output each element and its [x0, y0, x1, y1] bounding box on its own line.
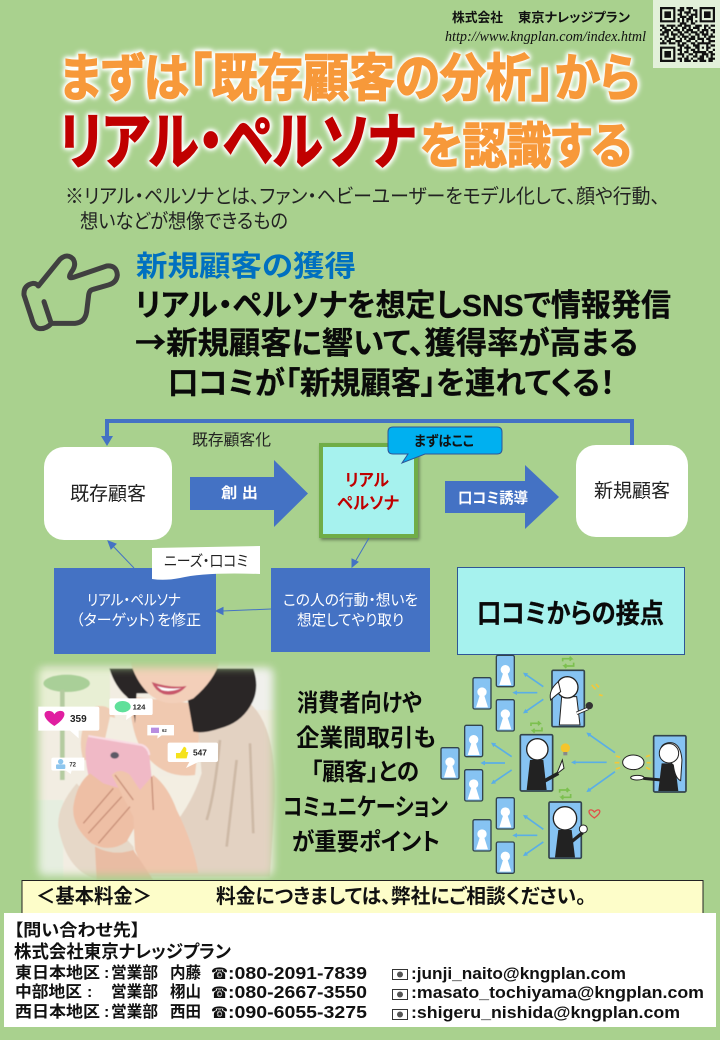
contact row: central: :masato_tochiyama@kngplan.com	[411, 983, 704, 1002]
person: speaker with speech bubble	[615, 736, 686, 792]
contact row: central: :	[87, 984, 92, 1001]
contact row: central: ☎	[211, 983, 228, 1002]
box: word of mouth touchpoint	[458, 568, 684, 654]
person: ponytail	[550, 670, 603, 727]
bubble: comment 124: 124	[133, 703, 146, 712]
bubble: person 72	[51, 758, 84, 774]
box: assume behaviour: この人の行動・想いを	[283, 592, 418, 609]
right hand	[112, 771, 198, 873]
contact row: west: :shigeru_nishida@kngplan.com	[411, 1003, 680, 1022]
website url: http://www.kngplan.com/index.html	[445, 29, 646, 45]
contact row: central: 営業部	[111, 982, 158, 1001]
bubble: heart 359: 359	[70, 714, 87, 725]
bubble: mail 62: 62	[162, 728, 167, 733]
arrow: revise to existing customers	[108, 541, 134, 568]
small phones	[441, 655, 514, 873]
spreading arrows	[484, 675, 615, 854]
contact row: east: :080-2091-7839	[228, 963, 367, 983]
person: waving with heart	[549, 802, 600, 858]
feedback loop arrow	[101, 421, 632, 446]
title line 2: リアル・ペルソナ	[59, 108, 415, 176]
consumer and B2B message: が重要ポイント	[292, 828, 440, 856]
wrist	[95, 847, 153, 880]
contact row: west: 西日本地区	[15, 1003, 100, 1021]
contact panel: 【問い合わせ先】	[14, 921, 140, 940]
label: becoming existing customer: 既存顧客化	[192, 431, 271, 449]
bubble: person 72: 72	[69, 763, 77, 769]
tag: needs and word of mouth: ニーズ・口コミ	[164, 553, 248, 570]
contact row: east	[15, 963, 626, 983]
share icons	[531, 657, 574, 799]
consumer and B2B message: 企業間取引も	[296, 725, 436, 752]
tag: needs and word of mouth	[152, 546, 260, 580]
main message: リアル・ペルソナを想定しSNSで情報発信	[135, 288, 671, 323]
box: revise persona: （ターゲット）を修正	[76, 612, 201, 629]
contact row: central: 中部地区	[15, 983, 82, 1001]
contact row: west: 西田	[170, 1004, 201, 1021]
contact row: west: :090-6055-3275	[228, 1002, 367, 1022]
contact row: east: 営業部	[111, 963, 158, 982]
contact row: east: :	[104, 965, 109, 982]
main message	[135, 288, 671, 401]
box: assume behaviour: 想定してやり取り	[297, 612, 404, 629]
box: revise persona	[54, 568, 216, 654]
arrow: persona to behaviour	[352, 538, 369, 567]
QR code	[653, 0, 720, 68]
main message: →新規顧客に響いて、獲得率が高まる	[135, 318, 638, 363]
bubble: mail 62	[147, 725, 174, 739]
persona definition note: 想いなどが想像できるもの	[80, 210, 288, 233]
face	[132, 664, 218, 702]
box: word of mouth touchpoint: 口コミからの接点	[477, 599, 664, 629]
title line 1: まずは「既存顧客の分析」から	[60, 50, 640, 107]
callout: start here: まずはここ	[414, 433, 474, 449]
box: existing customers: 既存顧客	[70, 483, 146, 505]
contact row: east: 内藤	[170, 964, 201, 982]
bubble: heart 359	[38, 707, 99, 738]
box: real persona: ペルソナ	[337, 494, 399, 513]
arrow: word of mouth guidance	[445, 465, 559, 529]
hair	[109, 668, 256, 732]
company name: 株式会社	[452, 10, 503, 25]
persona definition note	[65, 185, 660, 233]
contact row: east: :junji_naito@kngplan.com	[411, 964, 626, 983]
basic fee bar	[22, 880, 703, 914]
contact row: central: 栩山	[170, 983, 201, 1001]
phone	[86, 737, 152, 790]
illustration: word of mouth spreading between people	[441, 655, 686, 873]
company name: 東京ナレッジプラン	[518, 10, 631, 25]
chest	[130, 697, 200, 776]
box: new customers: 新規顧客	[594, 480, 670, 502]
contact panel: 株式会社東京ナレッジプラン	[14, 942, 231, 962]
bubble: thumbs up 547: 547	[193, 748, 207, 758]
cardigan	[143, 703, 275, 877]
arrow: creation	[190, 460, 308, 527]
contact row: east: 東日本地区	[15, 963, 100, 982]
shoulder	[81, 706, 115, 760]
consumer and B2B message: コミュニケーション	[283, 794, 448, 821]
bubble: comment 124	[109, 698, 153, 720]
arrow: creation: 創 出	[221, 485, 258, 502]
contact row: west: :	[104, 1004, 109, 1021]
consumer and B2B message	[283, 690, 448, 856]
photo: woman with smartphone and social reactions	[33, 662, 278, 880]
box: revise persona: リアル・ペルソナ	[87, 592, 181, 609]
box: real persona: リアル	[345, 471, 389, 490]
heading: new customer acquisition: 新規顧客の獲得	[136, 250, 356, 283]
sleeve left	[58, 783, 140, 880]
contact row: west	[15, 1002, 680, 1022]
icon: pointing hand	[24, 256, 117, 329]
bubble: thumbs up 547	[168, 743, 218, 768]
consumer and B2B message: 消費者向けや	[297, 690, 422, 717]
contact row: west: 営業部	[111, 1002, 158, 1021]
persona definition note: ※リアル・ペルソナとは、ファン・ヘビーユーザーをモデル化して、顔や行動、	[65, 185, 660, 208]
contact row: east: ☎	[211, 964, 228, 983]
consumer and B2B message: 「顧客」との	[311, 759, 419, 786]
contact row: central	[15, 982, 704, 1002]
person: pointing with idea	[520, 735, 570, 791]
box: existing customers	[44, 447, 172, 540]
box: new customers	[576, 445, 688, 537]
contact row: west: ☎	[211, 1003, 228, 1022]
inner top	[105, 716, 116, 740]
left hand fingers	[73, 773, 135, 848]
contact panel	[4, 913, 716, 1027]
contact row: central: :080-2667-3550	[228, 982, 367, 1002]
callout: start here	[388, 427, 502, 463]
box: assume behaviour	[271, 568, 430, 652]
box: real persona	[321, 445, 416, 536]
arrow: word of mouth guidance: 口コミ誘導	[458, 489, 528, 507]
arrow: behaviour to revise	[216, 608, 271, 614]
company name	[452, 10, 631, 25]
main message: 口コミが「新規顧客」を連れてくる！	[168, 366, 615, 401]
title line 2: を認識する	[420, 120, 632, 174]
basic fee bar: 料金につきましては、弊社にご相談ください。	[216, 884, 586, 908]
basic fee bar: ＜基本料金＞	[36, 885, 152, 908]
